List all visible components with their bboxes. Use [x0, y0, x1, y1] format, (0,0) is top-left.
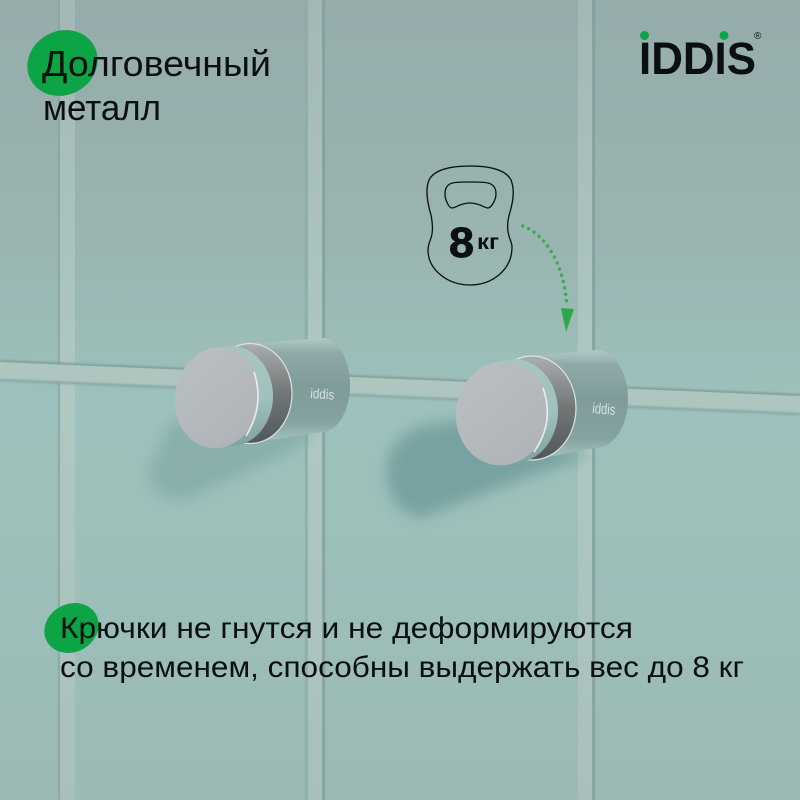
description line 2: со временем, способны выдержать вес до 8 кг — [60, 651, 744, 684]
arrow: dotted green — [523, 226, 574, 332]
shadow: right hook — [386, 420, 590, 518]
shadow: left hook — [148, 420, 320, 500]
hook face: left — [168, 342, 266, 454]
icon: kettlebell 8 kg — [427, 166, 513, 285]
heading line 1: Долговечный — [42, 43, 271, 84]
hook ring: left — [208, 344, 292, 444]
description block — [36, 594, 744, 684]
engraved brand: left: iddis — [310, 385, 335, 403]
hook collar: left — [217, 346, 273, 448]
logo: IDDIS: ® — [754, 31, 762, 42]
hook body: left — [250, 338, 350, 443]
kettlebell outline — [427, 166, 513, 285]
hook face: right — [449, 356, 555, 471]
hook body: right — [532, 350, 628, 460]
hook collar: right — [502, 359, 558, 465]
weight number: 8 — [449, 219, 474, 267]
green blob: description — [36, 594, 107, 662]
hook ring: right — [488, 356, 576, 460]
logo: IDDIS: IDDIS — [639, 33, 756, 84]
hook: right — [449, 350, 628, 471]
kettlebell handle — [445, 182, 496, 208]
description line 1: Крючки не гнутся и не деформируются — [60, 612, 633, 645]
weight unit: кг — [477, 231, 499, 254]
green blob: heading — [16, 18, 109, 108]
hook: left — [168, 338, 350, 454]
heading block — [16, 18, 271, 128]
heading line 2: металл — [43, 87, 161, 128]
engraved brand: right: iddis — [592, 400, 616, 419]
